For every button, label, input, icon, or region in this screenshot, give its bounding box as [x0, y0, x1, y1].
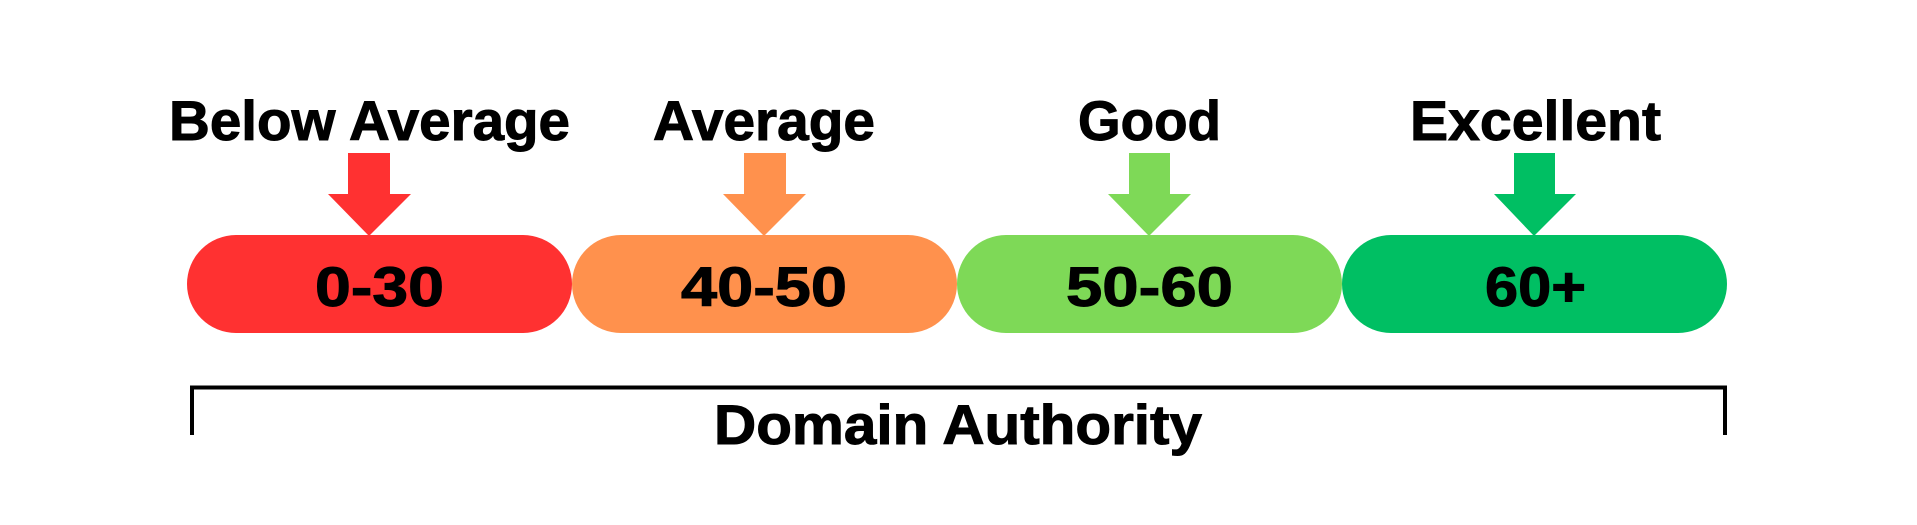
pill: 50-60: [957, 235, 1342, 333]
label: Good: Good: [1078, 89, 1221, 152]
pill: 40-50: 40-50: [681, 255, 847, 318]
pill: 60+: 60+: [1485, 255, 1586, 318]
pill: 40-50: [572, 235, 957, 333]
arrow: light green: [1108, 153, 1191, 236]
pill: 60+: [1342, 235, 1727, 333]
caption: Domain Authority: Domain Authority: [714, 393, 1202, 456]
pill: 0-30: 0-30: [315, 255, 444, 318]
label: Below Average: Below Average: [169, 89, 570, 152]
arrow: orange: [723, 153, 806, 236]
label: Average: Average: [653, 89, 875, 152]
pill: 0-30: [187, 235, 572, 333]
arrow: red: [328, 153, 411, 236]
arrow: dark green: [1494, 153, 1576, 236]
label: Excellent: Excellent: [1410, 89, 1661, 152]
bracket: [192, 388, 1725, 435]
pill: 50-60: 50-60: [1066, 255, 1233, 318]
